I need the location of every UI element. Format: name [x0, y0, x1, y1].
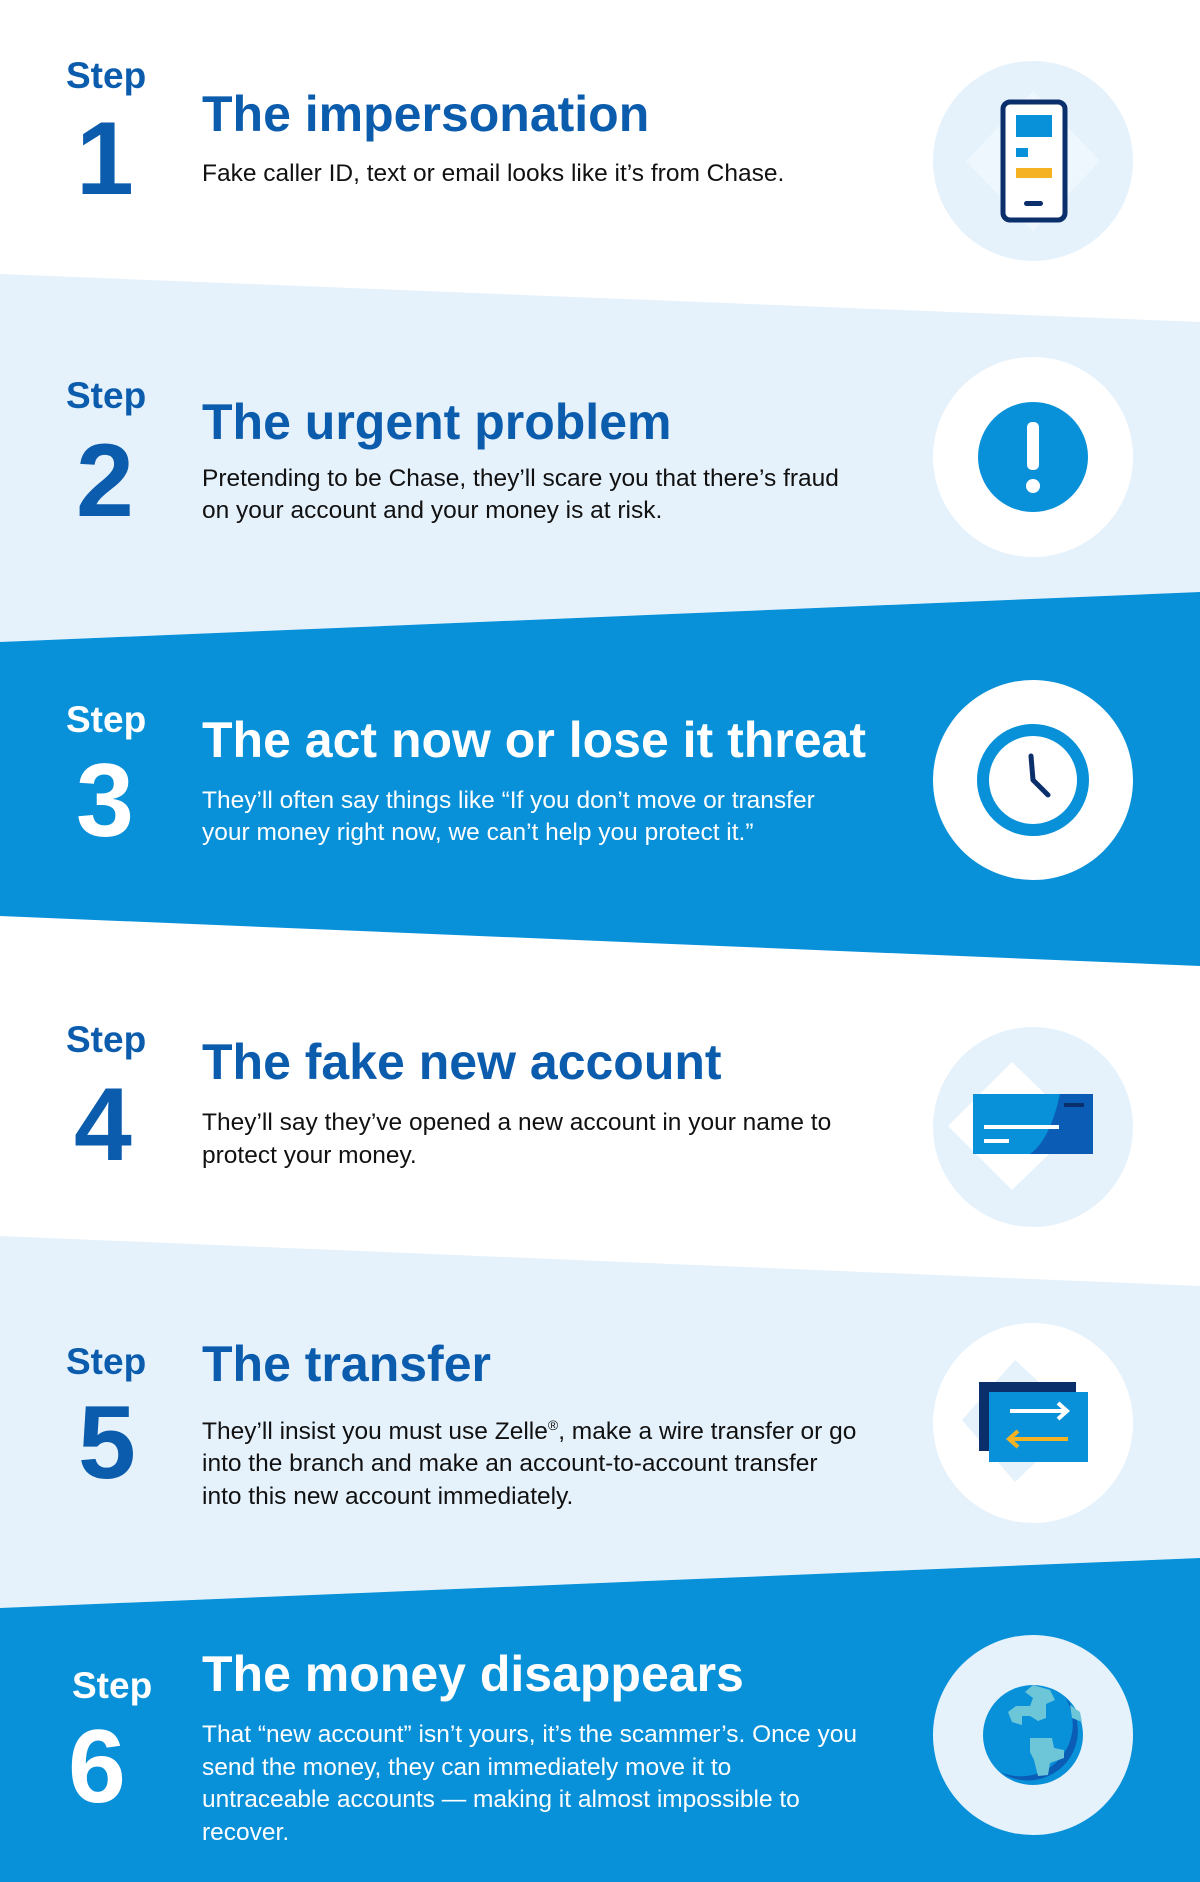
- icon: clock: [933, 680, 1133, 880]
- icon: transfer arrows: [933, 1323, 1133, 1523]
- text block: step 5 description: ®: [548, 1417, 559, 1433]
- text block: step 6 description: untraceable accounts — making it almost impossible to: [202, 1786, 800, 1813]
- heading: The fake new account: The fake new account: [202, 1034, 722, 1090]
- heading: The money disappears: The money disappears: [202, 1646, 744, 1702]
- panel: step 4: [66, 1019, 1133, 1227]
- text block: step 5 description: They’ll insist you must use Zelle: [202, 1417, 856, 1445]
- icon: account card: [933, 1027, 1133, 1227]
- step label 6: Step: [72, 1665, 152, 1706]
- heading: The act now or lose it threat: The act now or lose it threat: [202, 712, 866, 768]
- text block: step 5 description: into the branch and make an account-to-account transfer: [202, 1450, 818, 1477]
- panel: step 5: [66, 1323, 1133, 1523]
- step label 3: Step: [66, 699, 146, 740]
- panel: step 2: [66, 357, 1133, 557]
- step number 5: 5: [78, 1385, 136, 1501]
- step number 4: 4: [74, 1067, 132, 1183]
- heading: The impersonation: The impersonation: [202, 86, 649, 142]
- text block: step 2 description: on your account and your money is at risk.: [202, 497, 662, 524]
- text block: step 5 description: , make a wire transfer or go: [558, 1418, 856, 1445]
- panel: step 1: [66, 55, 1133, 261]
- text block: step 4 description: protect your money.: [202, 1142, 417, 1169]
- text block: step 6 description: That “new account” isn’t yours, it’s the scammer’s. Once you: [202, 1721, 857, 1748]
- icon: globe: [933, 1635, 1133, 1835]
- step number 3: 3: [76, 743, 134, 859]
- panel: step 3: [66, 680, 1133, 880]
- icon: phone: [933, 61, 1133, 261]
- text block: step 5 description: into this new account immediately.: [202, 1483, 573, 1510]
- step label 2: Step: [66, 375, 146, 416]
- icon: exclamation: [933, 357, 1133, 557]
- step number 2: 2: [76, 423, 134, 539]
- text block: step 3 description: your money right now, we can’t help you protect it.”: [202, 819, 754, 846]
- step label 4: Step: [66, 1019, 146, 1060]
- text block: step 6 description: send the money, they can immediately move it to: [202, 1754, 731, 1781]
- text block: step 4 description: They’ll say they’ve opened a new account in your name to: [202, 1109, 831, 1136]
- panel: step 6: [68, 1635, 1133, 1846]
- text block: step 1 description: Fake caller ID, text or email looks like it’s from Chase.: [202, 160, 784, 187]
- heading: The transfer: The transfer: [202, 1336, 491, 1392]
- step number 1: 1: [76, 101, 134, 217]
- step number 6: 6: [68, 1709, 126, 1825]
- step label 5: Step: [66, 1341, 146, 1382]
- step label 1: Step: [66, 55, 146, 96]
- text block: step 6 description: recover.: [202, 1819, 289, 1846]
- text block: step 3 description: They’ll often say things like “If you don’t move or transfer: [202, 787, 815, 814]
- heading: The urgent problem: The urgent problem: [202, 394, 671, 450]
- text block: step 2 description: Pretending to be Chase, they’ll scare you that there’s fraud: [202, 465, 839, 492]
